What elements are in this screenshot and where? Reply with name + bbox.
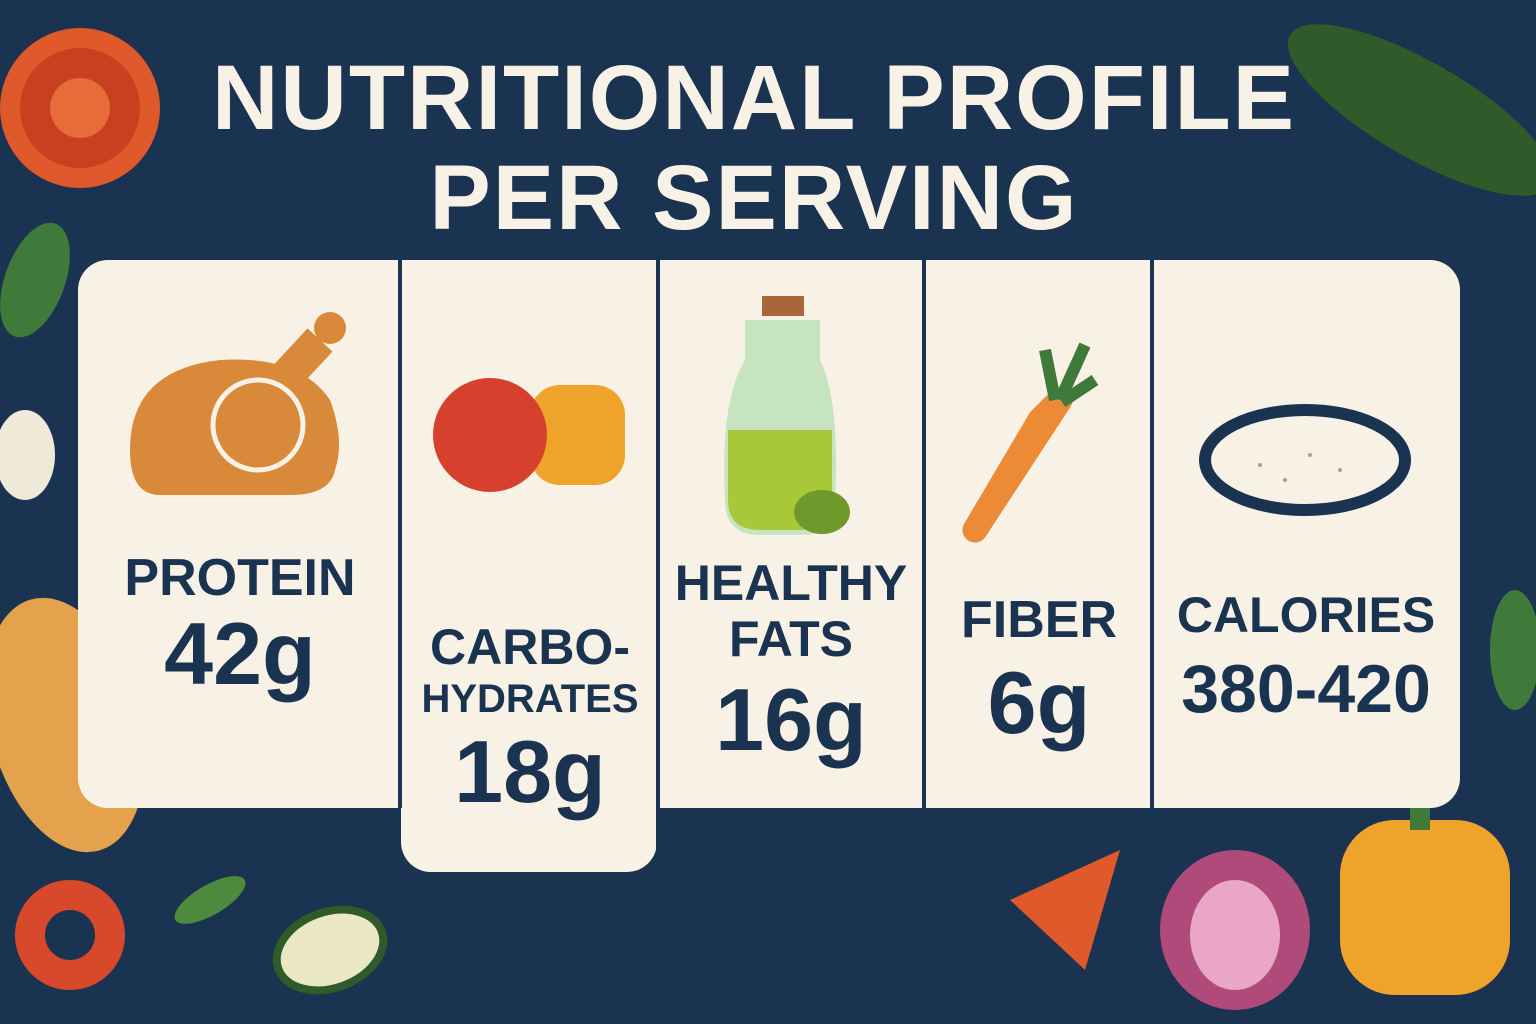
- title: PER SERVING: [429, 147, 1079, 249]
- panel: nutrition table: [78, 260, 1460, 808]
- icon: red onion: [1160, 850, 1310, 1010]
- text: carbohydrates: 18g: [454, 722, 606, 821]
- title: [212, 47, 1296, 249]
- text: healthy fats: HEALTHY: [675, 555, 907, 611]
- icon: chicken: [130, 312, 346, 495]
- text: fiber: FIBER: [961, 591, 1117, 649]
- text: fiber: 6g: [988, 653, 1090, 752]
- text: calories: [1177, 587, 1435, 727]
- text: protein: 42g: [164, 604, 316, 703]
- icon: zucchini top right: [1266, 0, 1536, 227]
- icon: bowl: [1205, 410, 1405, 510]
- text: healthy fats: 16g: [715, 670, 867, 769]
- icon: tomato and pepper: [433, 378, 625, 492]
- text: carbohydrates: HYDRATES: [421, 677, 639, 721]
- text: healthy fats: [675, 555, 907, 769]
- icon: leaf right: [1490, 590, 1536, 710]
- title: NUTRITIONAL PROFILE: [212, 47, 1296, 149]
- text: protein: [124, 549, 356, 703]
- icon: tomato bottom left: [15, 880, 125, 990]
- icon: carrot: [975, 345, 1095, 530]
- icon: tomato slice top left: [0, 28, 160, 188]
- text: protein: PROTEIN: [124, 549, 356, 607]
- icon: leaf left: [0, 213, 84, 347]
- text: calories: CALORIES: [1177, 587, 1435, 643]
- icon: bell pepper bottom right: [1340, 785, 1510, 995]
- panel: carbohydrates extension: [401, 260, 657, 872]
- text: carbohydrates: [421, 619, 639, 821]
- icon: olive oil bottle: [724, 296, 850, 535]
- dividers: [398, 260, 402, 808]
- icon: herb: [168, 867, 252, 933]
- text: fiber: [961, 591, 1117, 752]
- text: calories: 380-420: [1181, 651, 1431, 727]
- text: healthy fats: FATS: [729, 611, 853, 667]
- icon: tomato wedge: [1010, 850, 1120, 970]
- icon: garlic: [0, 410, 55, 500]
- text: carbohydrates: CARBO-: [430, 619, 630, 675]
- icon: zucchini slice: [265, 895, 395, 1005]
- icon: chicken breast: [0, 580, 171, 870]
